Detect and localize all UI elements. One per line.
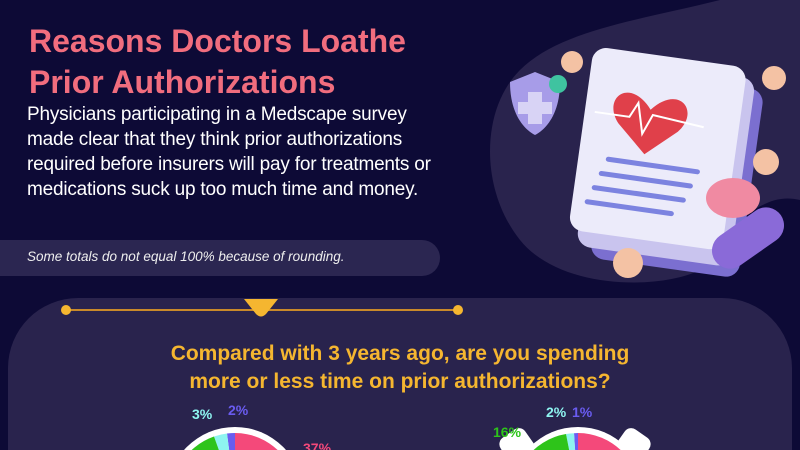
gauge chart left: 3%: [192, 406, 213, 422]
intro text: [27, 104, 431, 200]
gauge chart right: 2%: [546, 404, 567, 420]
title: Reasons Doctors Loathe: [29, 23, 406, 59]
title: [29, 23, 406, 100]
illustration: document with heart, pills, coins: [510, 48, 786, 278]
question heading: Compared with 3 years ago, are you spending: [171, 342, 629, 365]
gauge chart right: 1%: [572, 404, 593, 420]
bottom panel: [8, 298, 792, 450]
gauge chart right: 16%: [493, 424, 522, 440]
intro text: medications suck up too much time and money.: [27, 179, 418, 200]
gauge chart left: 2%: [228, 402, 249, 418]
gauge chart left: [184, 402, 332, 450]
intro text: made clear that they think prior authorizations: [27, 129, 402, 150]
question heading: [171, 342, 629, 393]
intro text: Physicians participating in a Medscape survey: [27, 104, 407, 125]
note bar: Some totals do not equal 100% because of rounding.: [27, 249, 344, 264]
intro text: required before insurers will pay for treatments or: [27, 154, 431, 175]
note bar: [0, 240, 440, 276]
question heading: more or less time on prior authorizations?: [189, 370, 611, 393]
decorative connector with marker: [61, 299, 463, 316]
title: Prior Authorizations: [29, 64, 335, 100]
gauge chart right: [493, 404, 651, 450]
